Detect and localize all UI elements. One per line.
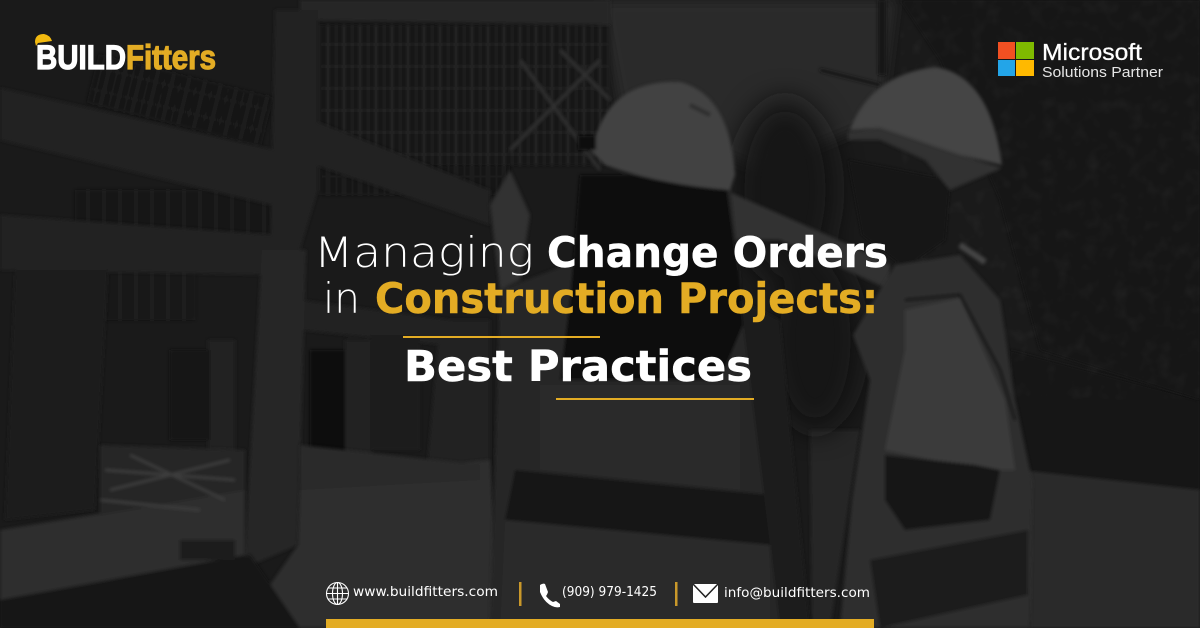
title block: Construction Projects: xyxy=(375,274,878,323)
title block xyxy=(314,228,888,400)
divider xyxy=(519,582,522,606)
icon: phone xyxy=(540,584,560,607)
yellow footer bar xyxy=(326,619,874,628)
logo: BuildFitters xyxy=(35,34,216,77)
phone number: (909) 979-1425 xyxy=(562,584,657,600)
concrete beams and columns xyxy=(0,0,610,568)
contact row xyxy=(326,582,870,607)
scaffolding windows xyxy=(65,25,610,320)
bottom rule xyxy=(556,398,754,400)
worker two with hard hat and vest xyxy=(840,67,1032,628)
worker one with hard hat and vest xyxy=(490,82,890,628)
divider xyxy=(675,582,678,606)
email: info@buildfitters.com xyxy=(724,585,870,601)
trees xyxy=(735,100,860,430)
sky behind workers xyxy=(600,0,895,170)
ground and debris xyxy=(0,350,1200,628)
logo: Microsoft Solutions Partner xyxy=(998,39,1163,81)
top rule xyxy=(403,336,600,338)
title block: Change Orders xyxy=(547,228,888,277)
Microsoft wordmark: Microsoft xyxy=(1042,39,1143,65)
subheading: Best Practices xyxy=(404,342,752,392)
tree foliage texture xyxy=(900,0,1200,400)
icon: globe xyxy=(326,582,348,604)
icon: Microsoft four squares xyxy=(998,42,1034,76)
logo wordmark: BUILDFitters xyxy=(36,39,216,77)
icon: envelope xyxy=(693,584,718,603)
heading line 1: Managing xyxy=(314,228,534,277)
heading line 2: in xyxy=(323,274,360,323)
icon: yellow hard hat xyxy=(35,34,52,46)
website: www.buildfitters.com xyxy=(353,584,498,600)
Solutions Partner caption: Solutions Partner xyxy=(1042,64,1163,81)
